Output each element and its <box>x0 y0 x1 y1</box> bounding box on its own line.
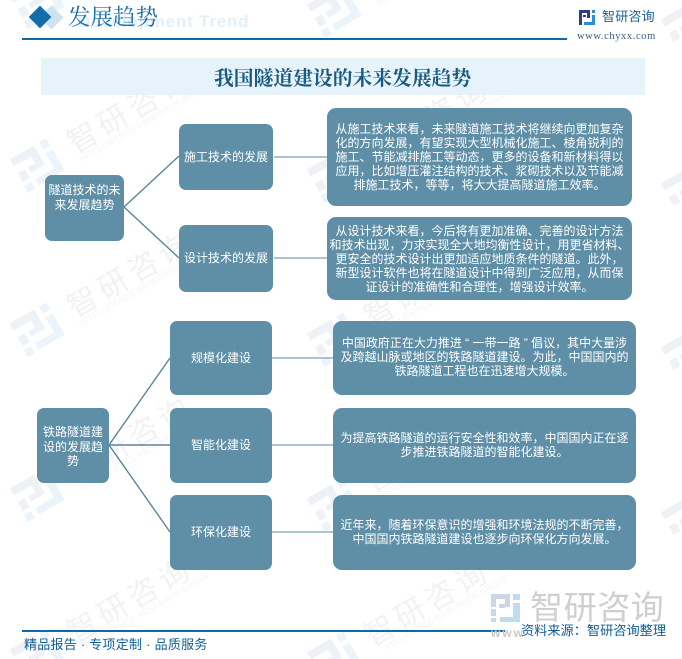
text block: construction technology <box>327 108 632 206</box>
watermark layer: TELLIGENCE RESEARCH GROUP <box>383 572 510 652</box>
panel: railway tunnel root <box>37 408 109 483</box>
text block: scale construction: 及跨越山脉或地区的铁路隧道建设。为此，中国国内的 <box>340 350 628 364</box>
icon: blue diamond <box>29 6 51 28</box>
watermark layer: INTELLIGENCE RESEARCH GROUP <box>78 80 212 164</box>
watermark layer: 智研咨询 <box>62 226 200 324</box>
panel: railway tunnel root: 设的发展趋 <box>43 440 103 454</box>
icon: brand mark <box>579 10 595 25</box>
brand logo <box>579 10 595 25</box>
header rule <box>22 38 567 40</box>
text block: design technology: 从设计技术来看，今后将有更加准确、完善的设计方法 <box>335 224 624 238</box>
panel: construction technology <box>179 124 273 190</box>
panel: railway tunnel root: 势 <box>67 454 79 468</box>
text block: green construction: 中国国内铁路隧道建设也逐步向环保化方向发展。 <box>352 532 616 546</box>
panel: green construction <box>170 495 272 570</box>
text block: green construction: 近年来，随着环保意识的增强和环境法规的不断完善， <box>340 518 628 532</box>
title: 我国隧道建设的未来发展趋势 <box>214 68 471 90</box>
watermark layer: INTELLIGENCE RESEARCH GROUP <box>375 90 509 174</box>
text block: green construction <box>333 495 636 570</box>
text block: design technology: 和技术出现，力求实现全大地均衡性设计，用更省材料、 <box>329 238 630 252</box>
text block: construction technology: 应用，比如增压灌注结构的技术、浆砌技术以及节能减 <box>335 164 624 178</box>
panel: intelligent construction <box>170 408 272 483</box>
heading ghost text: Development Trend <box>78 12 249 31</box>
watermark layer: 智研咨询 <box>359 401 497 499</box>
text block: scale construction: 铁路隧道工程也在迅速增大规模。 <box>394 364 574 378</box>
watermark layer: INTELLIGENCE RESEARCH GROUP <box>78 409 212 493</box>
heading text: 发展趋势 <box>68 5 158 30</box>
panel: intelligent construction: 智能化建设 <box>191 438 251 452</box>
text block: intelligent construction <box>333 408 636 483</box>
watermark layer: 智研咨询 <box>62 62 200 160</box>
header: section heading <box>28 5 249 31</box>
watermark layer: 智研咨询 <box>359 72 497 170</box>
panel: green construction: 环保化建设 <box>191 525 251 539</box>
watermark layer: 智研咨询 <box>62 552 200 650</box>
brand url: www.chyxx.com <box>577 31 656 42</box>
panel: tunnel technology root <box>45 175 124 241</box>
footer watermark name: 智研咨询 <box>530 589 664 626</box>
source note: 资料来源：智研咨询整理 <box>521 623 666 638</box>
text block: design technology <box>327 217 632 300</box>
panel: tunnel technology root: 来发展趋势 <box>54 198 114 212</box>
footer watermark url: www <box>491 626 525 640</box>
footer rule <box>22 630 505 632</box>
panel: design technology: 设计技术的发展 <box>184 251 268 265</box>
watermark layer: 智研咨询 <box>62 391 200 489</box>
text block: design technology: 新型设计软件也将在隧道设计中得到广泛应用，从而保 <box>335 266 624 280</box>
panel: scale construction: 规模化建设 <box>191 351 251 365</box>
panel: construction technology: 施工技术的发展 <box>184 150 268 164</box>
title bar <box>41 58 645 95</box>
text block: construction technology: 化的方向发展，有望实现大型机械化施工、棱角锐利的 <box>335 136 624 150</box>
text block: design technology: 更安全的技术设计出更加适应地质条件的隧道。此外， <box>335 252 624 266</box>
text block: scale construction: 中国政府正在大力推进 “ 一带一路 ” 倡议，其中大量涉 <box>342 336 627 350</box>
watermark layer: INTELLIGENCE RESEARCH GROUP <box>78 570 212 654</box>
brand name: 智研咨询 <box>602 9 655 24</box>
watermark layer: 智研咨询 <box>359 236 497 334</box>
text block: intelligent construction: 为提高铁路隧道的运行安全性和效率，中国国内正在逐 <box>340 431 628 445</box>
text block: intelligent construction: 步推进铁路隧道的智能化建设。 <box>400 445 568 459</box>
icon: pale diamond <box>39 5 64 30</box>
text block: scale construction <box>333 321 636 395</box>
panel: tunnel technology root: 隧道技术的未 <box>48 183 120 197</box>
watermark layer: INTELLIGENCE RESEARCH GROUP <box>375 254 509 338</box>
text block: construction technology: 排施工技术，等等，将大大提高隧道施工效率。 <box>353 178 606 192</box>
watermark layer: INTELLIGENCE RESEARCH GROUP <box>78 244 212 328</box>
watermark layer: INTELLIGENCE RESEARCH GROUP <box>375 419 509 503</box>
text block: construction technology: 从施工技术来看，未来隧道施工技术将继续向更加复杂 <box>335 122 624 136</box>
text block: construction technology: 施工、节能减排施工等动态，更多的设备和新材料得以 <box>335 150 624 164</box>
panel: scale construction <box>170 321 272 395</box>
footer slogan: 精品报告 · 专项定制 · 品质服务 <box>24 637 208 652</box>
watermark layer: 智研咨询 <box>359 555 497 653</box>
panel: design technology <box>179 225 273 292</box>
panel: railway tunnel root: 铁路隧道建 <box>43 425 103 439</box>
text block: design technology: 证设计的准确性和合理性，增强设计效率。 <box>365 280 594 294</box>
